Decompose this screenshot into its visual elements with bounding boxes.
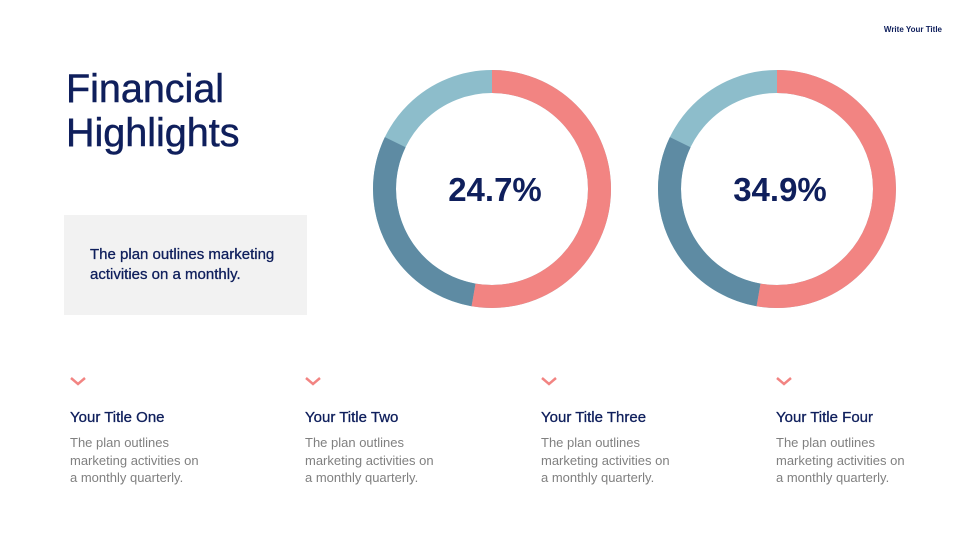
title: Highlights: [66, 111, 239, 155]
callout box: The plan outlines marketing: [90, 246, 274, 263]
donut chart 2: 34.9%: [733, 171, 827, 208]
column 3: The plan outlines: [541, 435, 640, 450]
column 2: a monthly quarterly.: [305, 470, 418, 485]
top-right label: Write Your Title: [884, 25, 942, 34]
title: [66, 67, 239, 155]
column 4: Your Title Four: [776, 409, 873, 426]
column 4: [776, 377, 905, 485]
callout box: activities on a monthly.: [90, 266, 241, 283]
column 1: Your Title One: [70, 409, 165, 426]
column 3: [541, 377, 670, 485]
column 4: The plan outlines: [776, 435, 875, 450]
column 4: marketing activities on: [776, 452, 905, 468]
column 2: [305, 377, 434, 485]
column 2: marketing activities on: [305, 452, 434, 468]
column 1: marketing activities on: [70, 452, 199, 468]
column 3: Your Title Three: [541, 409, 646, 426]
title: Financial: [66, 67, 224, 111]
column 1: The plan outlines: [70, 435, 169, 450]
callout box: [64, 215, 307, 315]
column 2: Your Title Two: [305, 409, 398, 426]
column 1: [70, 377, 199, 485]
column 3: marketing activities on: [541, 452, 670, 468]
column 2: The plan outlines: [305, 435, 404, 450]
column 3: a monthly quarterly.: [541, 470, 654, 485]
column 4: a monthly quarterly.: [776, 470, 889, 485]
donut chart 1: 24.7%: [448, 171, 542, 208]
column 1: a monthly quarterly.: [70, 470, 183, 485]
